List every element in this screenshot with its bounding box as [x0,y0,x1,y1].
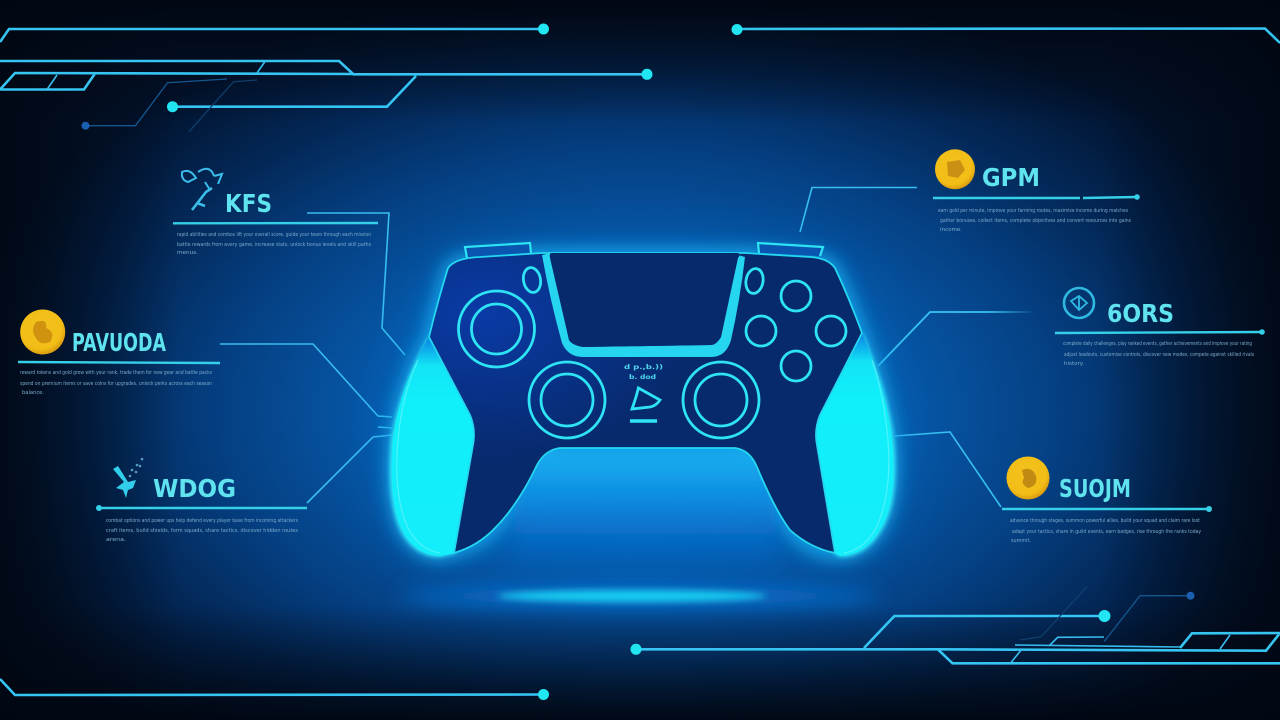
body text: craft items, build shields, form squads, share tactics, discover hidden routes [106,528,298,534]
icon: gold coin [20,310,65,354]
body text: combat options and power ups help defend every player base from incoming attackers [106,518,298,524]
title: 6ORS [1107,299,1174,328]
connector: PAVUODA [220,344,392,417]
body text: summit. [1011,538,1031,544]
centre small label: d p.,b.)) [624,364,663,371]
circuit lines: top right [732,24,1280,43]
area between grips [515,446,775,571]
body text: income. [940,227,962,233]
centre dash [630,419,657,423]
body text: balance. [22,390,44,396]
bottom right thumbstick [683,362,759,438]
top left thumbstick [458,291,534,367]
body text: menus. [177,250,198,256]
divider [173,222,378,225]
title: PAVUODA [72,328,166,357]
circuit lines: bottom left [0,679,549,700]
body text [106,518,298,543]
body text [1010,518,1201,544]
icon: gold coin [1006,456,1050,500]
callout: GPM [933,149,1140,233]
centre play symbol [632,388,660,409]
body text [177,232,371,256]
body text: spend on premium items or save coins for upgrades, unlock perks across each season [20,381,212,387]
icon: sword spark [113,458,143,498]
centre small label: b. dod [629,374,656,381]
callout: WDOG [96,458,307,543]
connector: WDOG [307,427,392,503]
divider [96,505,307,511]
right shoulder button [758,243,823,256]
callout: SUOJM [1002,456,1212,544]
circuit lines: top left [0,24,652,132]
icon: gold coin [935,149,975,189]
icon: network branch [182,169,222,210]
body text: reward tokens and gold grow with your rank, trade them for new gear and battle packs [20,370,212,376]
divider [1002,506,1212,512]
body text [20,370,212,396]
body text [1063,341,1254,367]
callout: KFS [173,169,378,256]
body text: battle rewards from every game, increase stats, unlock bonus levels and skill paths [177,242,371,248]
icon: gear network [1064,288,1094,318]
centre small label [624,364,663,381]
circuit lines: bottom right [630,587,1280,663]
body text [938,208,1131,233]
connector lines [220,188,1035,507]
right grip [816,333,896,557]
title: GPM [982,163,1040,192]
oval buttons [521,266,765,295]
divider [18,362,220,363]
callout: 6ORS [1055,288,1265,367]
callout: PAVUODA [18,310,220,396]
body text: adapt your tactics, share in guild events, earn badges, rise through the ranks today [1012,529,1201,535]
connector: KFS [307,213,405,355]
body text: advance through stages, summon powerful allies, build your squad and claim rare loot [1010,518,1200,524]
body text: gather bonuses, collect items, complete objectives and convert resources into gains [940,218,1131,224]
left grip [390,337,474,557]
controller glow [392,253,894,556]
connector: SUOJM [895,432,1001,507]
touchpad [542,253,745,357]
body text: earn gold per minute, improve your farming routes, maximise income during matches [938,208,1128,214]
connector: 6ORS [878,312,1035,366]
bottom left thumbstick [529,362,605,438]
title: KFS [225,189,272,218]
body text: history. [1064,361,1084,367]
body text: arena. [106,537,126,543]
wide halo [393,268,892,540]
title: SUOJM [1059,474,1131,503]
divider [1055,329,1265,335]
controller body [429,253,862,553]
game controller [390,243,896,571]
floor reflection [400,586,880,606]
title: WDOG [153,474,236,503]
action buttons [746,281,846,381]
body text: rapid abilities and combos lift your overall score, guide your team through each mission [177,232,371,238]
connector: GPM [800,188,917,232]
left shoulder button [465,243,531,258]
divider [933,194,1140,200]
